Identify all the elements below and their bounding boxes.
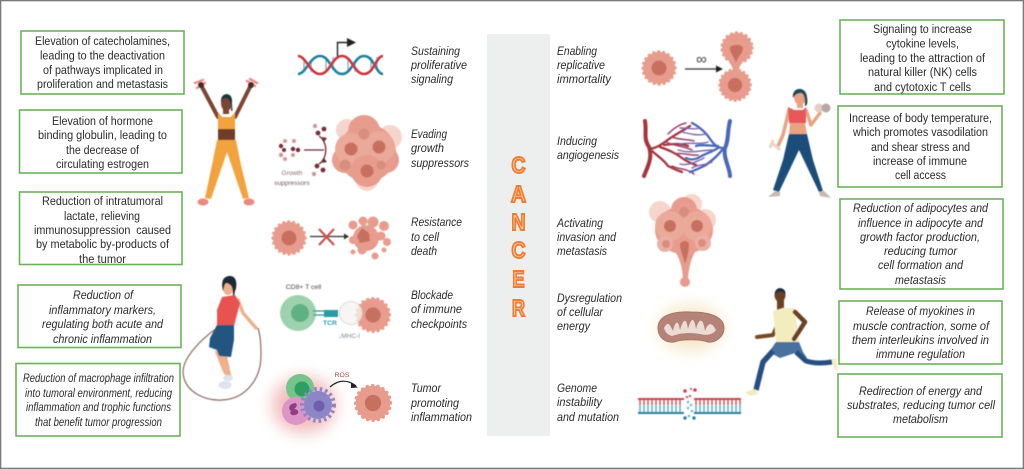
icon: man running	[745, 288, 838, 396]
label: blockade of immune checkpoints	[411, 288, 467, 331]
label: evading growth suppressors: Evading	[411, 127, 447, 141]
label: genome instability and mutation: Genome	[557, 381, 597, 395]
text: adipocytes effect: reducing tumor	[884, 244, 958, 258]
label: tumor promoting inflammation: promoting	[410, 396, 459, 410]
text: energy redirection effect: Redirection of energy and	[859, 384, 983, 398]
text: inflammatory markers effect: regulating both acute and	[42, 317, 164, 331]
text: catecholamines effect: of pathways implicated in	[43, 63, 163, 77]
label: genome instability and mutation: and mutation	[557, 410, 619, 424]
label: genome instability and mutation	[557, 381, 619, 424]
icon: woman curling dumbbells	[768, 89, 831, 198]
label: resistance to cell death: Resistance	[411, 215, 462, 229]
panel: exercise effect, energy redirection	[838, 374, 1002, 437]
label: tumor promoting inflammation: Tumor	[411, 381, 442, 395]
label: tumor promoting inflammation: inflammation	[411, 410, 472, 424]
label: dysregulation of cellular energy: of cellular	[557, 305, 604, 319]
text: myokines effect	[852, 304, 990, 361]
illustration: growth suppressors and tumor cluster	[274, 115, 402, 191]
text: inflammatory markers effect: Reduction of	[73, 288, 134, 302]
label: inducing angiogenesis	[557, 134, 619, 162]
text: adipocytes effect: influence in adipocyte and	[858, 216, 984, 230]
text: macrophage infiltration effect: that benefit tumor progression	[35, 415, 162, 429]
text: body temperature effect: cell access	[895, 168, 946, 182]
label: resistance to cell death: to cell	[411, 230, 440, 244]
panel: exercise effect, hormone binding globulin	[20, 110, 182, 173]
panel: exercise effect, intratumoral lactate	[20, 192, 182, 266]
text: cytokine signaling effect: leading to the attraction of	[860, 51, 985, 65]
text: catecholamines effect: proliferation and metastasis	[37, 77, 168, 91]
label: activating invasion and metastasis: invasion and	[557, 230, 617, 244]
label: sustaining proliferative signaling	[410, 44, 467, 86]
panel: exercise effect, macrophage infiltration	[16, 364, 180, 436]
text: intratumoral lactate effect: lactate, relieving	[64, 209, 140, 223]
text: body temperature effect: increase of immune	[873, 154, 967, 168]
illustration: dividing cell with infinity arrow	[643, 33, 752, 100]
label: enabling replicative immortality: immortality	[557, 72, 612, 86]
text: inflammatory markers effect: inflammatory markers,	[49, 303, 156, 317]
text: energy redirection effect	[847, 384, 996, 426]
text: adipocytes effect: metastasis	[895, 273, 946, 287]
text: catecholamines effect: leading to the deactivation	[40, 48, 165, 62]
text: cytokine signaling effect: and cytotoxic T cells	[874, 80, 971, 94]
text: macrophage infiltration effect: Reduction of macrophage infiltration	[23, 371, 174, 385]
label: evading growth suppressors	[411, 127, 469, 170]
heading: CANCER vertical title: R	[512, 295, 525, 321]
icon: woman lifting dumbbells overhead	[195, 79, 257, 206]
text: energy redirection effect: substrates, reducing tumor cell	[847, 398, 996, 412]
illustration: blood vessel network	[644, 121, 730, 176]
label: resistance to cell death	[411, 215, 462, 258]
text: hormone binding globulin effect: Elevation of hormone	[52, 114, 153, 128]
text: adipocytes effect: Reduction of adipocytes and	[853, 201, 989, 215]
label: dysregulation of cellular energy	[557, 291, 622, 333]
label: inducing angiogenesis: angiogenesis	[557, 148, 619, 162]
text: inflammatory markers effect: chronic inflammation	[53, 332, 152, 346]
text: growth suppressors caption: Growth	[282, 170, 303, 177]
text: adipocytes effect	[853, 201, 989, 287]
text: macrophage infiltration effect: inflammation and trophic functions	[26, 400, 171, 414]
label: sustaining proliferative signaling: proliferative	[410, 58, 467, 72]
label: tumor promoting inflammation	[410, 381, 472, 424]
text: body temperature effect: and shear stress and	[871, 140, 970, 154]
text: myokines effect: Release of myokines in	[866, 304, 975, 318]
heading: CANCER vertical title: N	[512, 209, 526, 235]
text: intratumoral lactate effect: Reduction of intratumoral	[42, 194, 163, 208]
text: growth suppressors caption: suppressors	[274, 180, 310, 187]
text: ROS caption: ROS	[335, 372, 350, 379]
text: cytokine signaling effect	[860, 22, 985, 94]
text: CD8+ T cell, TCR and MHC-I captions	[286, 284, 360, 340]
illustration: broken DNA strand	[638, 388, 741, 420]
text: catecholamines effect	[35, 34, 170, 91]
text: growth suppressors caption	[274, 170, 310, 187]
label: activating invasion and metastasis: Activating	[556, 216, 603, 230]
text: cytokine signaling effect: natural killer (NK) cells	[868, 65, 977, 79]
heading: CANCER vertical title	[511, 152, 526, 321]
text: myokines effect: them interleukins involved in	[852, 333, 989, 347]
panel: exercise effect, adipocytes	[840, 199, 1003, 289]
text: adipocytes effect: growth factor production,	[860, 230, 980, 244]
panel: exercise effect, cytokine signaling	[840, 20, 1004, 94]
text: hormone binding globulin effect: the decrease of	[66, 143, 139, 157]
label: blockade of immune checkpoints: Blockade	[411, 288, 453, 302]
text: catecholamines effect: Elevation of catecholamines,	[35, 34, 170, 48]
text: hormone binding globulin effect: binding globulin, leading to	[38, 128, 167, 142]
icon: woman skipping rope	[183, 276, 261, 400]
text: infinity symbol: ∞	[696, 51, 707, 68]
text: body temperature effect: Increase of body temperature,	[849, 111, 992, 125]
text: cytokine signaling effect: cytokine levels,	[886, 36, 959, 50]
illustration: DNA with promoter arrow	[298, 38, 383, 74]
heading: CANCER vertical title: C	[512, 237, 526, 263]
panel: central cancer column	[487, 34, 550, 436]
label: blockade of immune checkpoints: of immune	[411, 302, 462, 316]
illustration: immune cells releasing ROS toward tumor cell	[272, 372, 390, 433]
label: blockade of immune checkpoints: checkpoints	[411, 317, 467, 331]
illustration: resistance to cell death	[273, 216, 391, 260]
text: intratumoral lactate effect: by metabolic by-products of	[36, 237, 169, 251]
text: CD8+ T cell, TCR and MHC-I captions: TCR	[323, 320, 337, 327]
text: adipocytes effect: cell formation and	[878, 258, 964, 272]
label: dysregulation of cellular energy: Dysregulation	[557, 291, 622, 305]
label: resistance to cell death: death	[411, 244, 437, 258]
panel: exercise effect, inflammatory markers	[18, 285, 181, 348]
text: CD8+ T cell, TCR and MHC-I captions: ↓MHC-I	[338, 333, 360, 340]
text: energy redirection effect: metabolism	[893, 412, 948, 426]
label: evading growth suppressors: suppressors	[411, 156, 469, 170]
panel: exercise effect, body temperature	[838, 106, 1002, 187]
text: myokines effect: immune regulation	[876, 347, 965, 361]
heading: CANCER vertical title: E	[512, 266, 524, 292]
heading: CANCER vertical title: C	[512, 152, 526, 178]
panel: exercise effect, myokines	[839, 301, 1002, 364]
label: genome instability and mutation: instability	[557, 395, 603, 409]
text: macrophage infiltration effect	[23, 371, 174, 429]
heading: CANCER vertical title: A	[511, 181, 526, 207]
text: hormone binding globulin effect	[38, 114, 167, 171]
label: sustaining proliferative signaling: signaling	[411, 72, 453, 86]
text: cytokine signaling effect: Signaling to increase	[873, 22, 972, 36]
text: CD8+ T cell, TCR and MHC-I captions: CD8+ T cell	[286, 284, 322, 291]
label: sustaining proliferative signaling: Sustaining	[411, 44, 460, 58]
illustration: tumor cluster invading with tail	[649, 194, 716, 287]
label: inducing angiogenesis: Inducing	[557, 134, 597, 148]
label: activating invasion and metastasis	[556, 216, 617, 258]
label: dysregulation of cellular energy: energy	[557, 319, 591, 333]
text: intratumoral lactate effect: immunosuppression caused	[34, 223, 171, 237]
text: myokines effect: muscle contraction, some of	[853, 319, 990, 333]
label: evading growth suppressors: growth	[411, 141, 444, 155]
label: enabling replicative immortality	[557, 44, 612, 86]
text: hormone binding globulin effect: circulating estrogen	[56, 157, 149, 171]
text: body temperature effect	[849, 111, 992, 182]
label: activating invasion and metastasis: metastasis	[557, 244, 607, 258]
illustration: immune checkpoint T cell and tumor cell	[280, 284, 389, 340]
label: enabling replicative immortality: Enabling	[557, 44, 597, 58]
panel: exercise effect, catecholamines	[21, 31, 184, 94]
text: intratumoral lactate effect	[34, 194, 171, 266]
text: macrophage infiltration effect: into tumoral environment, reducing	[25, 386, 172, 400]
label: enabling replicative immortality: replicative	[557, 58, 605, 72]
text: inflammatory markers effect	[42, 288, 164, 346]
text: intratumoral lactate effect: the tumor	[79, 252, 126, 266]
illustration: mitochondrion	[658, 306, 724, 350]
text: body temperature effect: which promotes vasodilation	[852, 125, 988, 139]
